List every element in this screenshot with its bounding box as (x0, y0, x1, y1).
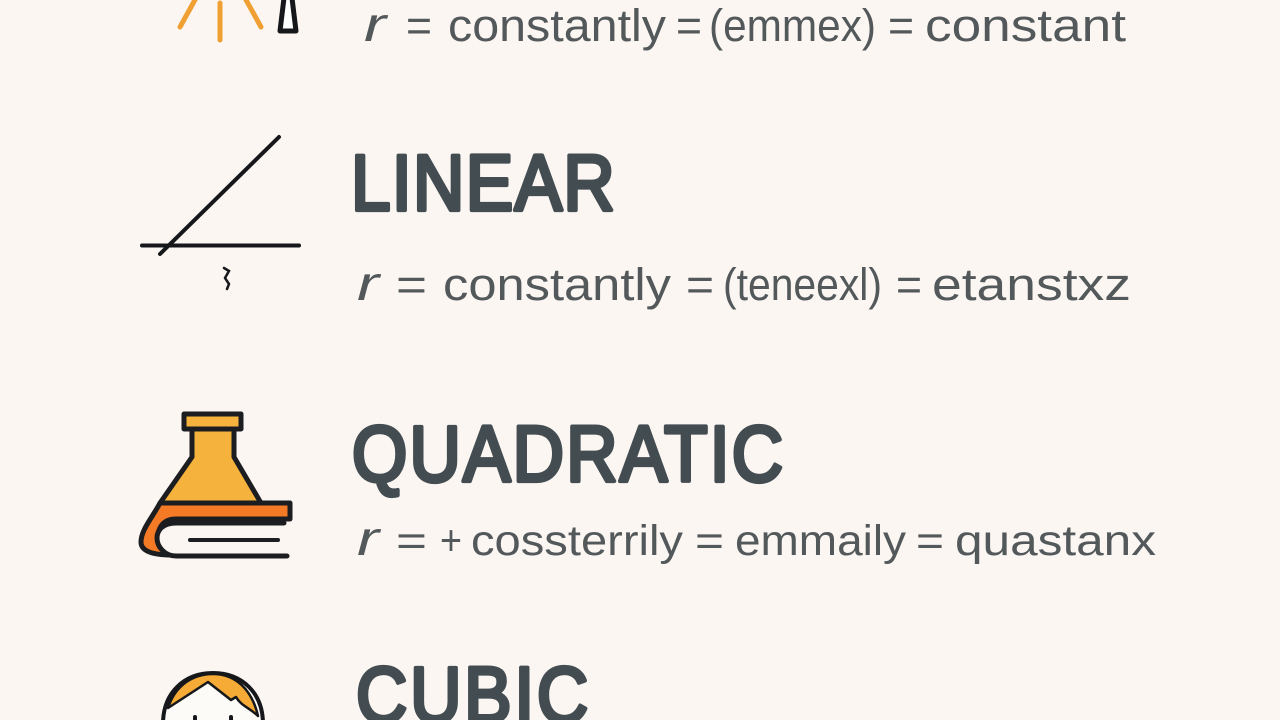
formula: zero-order row: r (364, 0, 389, 52)
formula: linear row: (teneexl) (723, 259, 882, 310)
icon: flask on book (141, 414, 290, 556)
formula: quadratic row: emmaily (735, 517, 907, 565)
heading: QUADRATIC: QUADRATIC (352, 410, 783, 498)
formula: zero-order row: = (676, 0, 702, 51)
formula: zero-order row: = (888, 0, 914, 51)
formula: linear row: = (686, 259, 714, 310)
icon: child head, cropped at bottom (163, 673, 263, 720)
formula: quadratic row: = (695, 517, 724, 565)
formula: quadratic row: quastanx (955, 517, 1157, 565)
formula: linear row: = (896, 259, 922, 310)
formula: linear row (357, 258, 1131, 311)
heading: LINEAR: LINEAR (351, 139, 615, 227)
formula: zero-order row: = (406, 0, 432, 51)
formula: zero-order row (364, 0, 1127, 52)
formula: quadratic row: = (396, 517, 427, 565)
formula: linear row: constantly (443, 259, 672, 310)
formula: quadratic row: r (357, 513, 382, 566)
formula: quadratic row: + (440, 517, 462, 565)
formula: linear row: etanstxz (932, 259, 1131, 310)
formula: quadratic row (357, 513, 1157, 566)
formula: linear row: = (396, 259, 427, 310)
formula: zero-order row: constantly (448, 0, 667, 51)
formula: zero-order row: (emmex) (709, 0, 876, 51)
icon: sun rays and bottle, cropped at top (180, 0, 296, 40)
formula: linear row: r (357, 258, 382, 311)
formula: zero-order row: constant (925, 0, 1127, 51)
formula: quadratic row: cossterrily (471, 517, 684, 565)
formula: quadratic row: = (916, 517, 944, 565)
icon: linear graph (142, 137, 299, 289)
